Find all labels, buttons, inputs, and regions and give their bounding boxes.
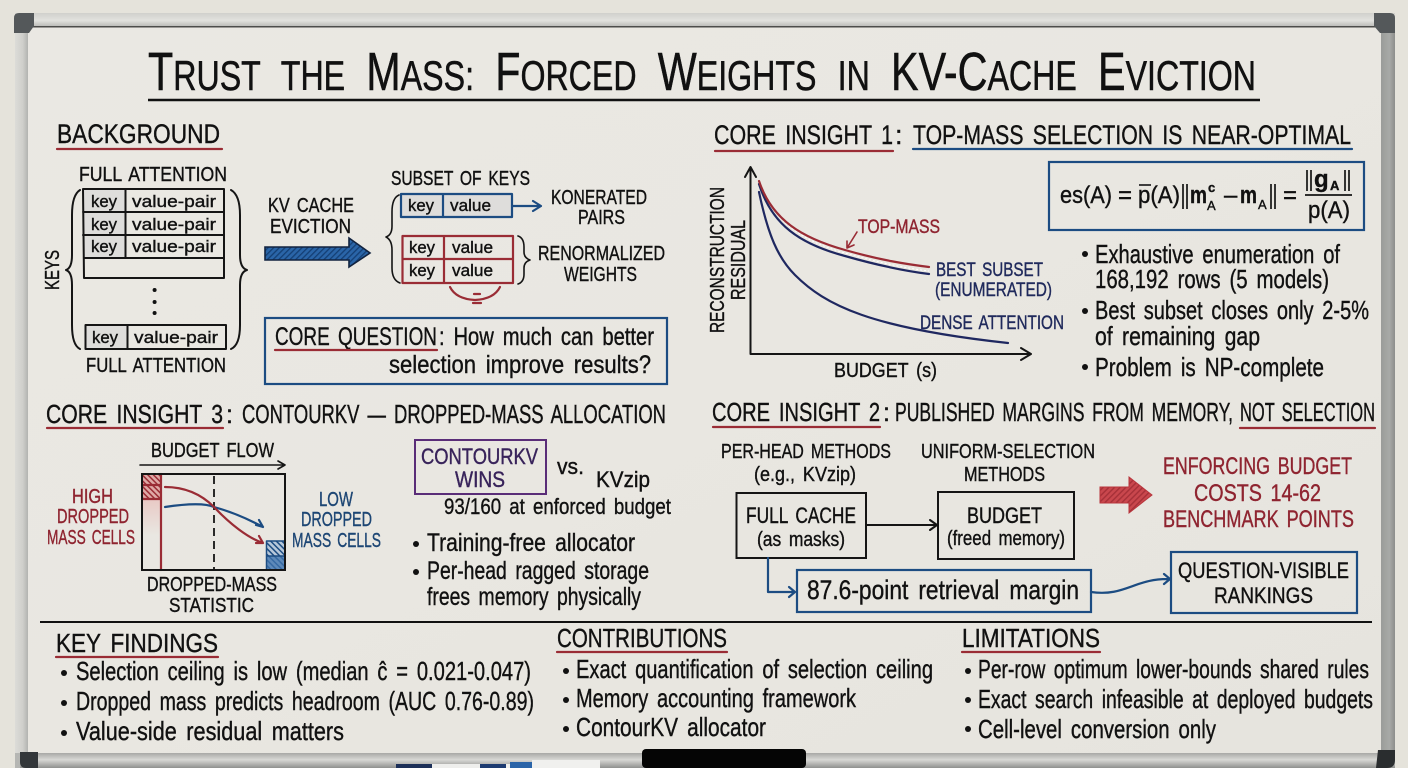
arrow: kv cache eviction — [265, 195, 370, 267]
arrow: kv cache eviction: KV CACHE — [268, 195, 354, 217]
subset of keys: SUBSET OF KEYS — [391, 168, 530, 190]
diagram: budget flow: DROPPED — [301, 509, 372, 531]
formula box: p(A) — [1138, 182, 1180, 209]
full attention table: key — [91, 237, 117, 256]
callout: core question: : How much can better — [439, 323, 654, 351]
flow diagram: memory margins: PER-HEAD METHODS — [721, 441, 891, 463]
bullet list: contributions — [563, 654, 933, 742]
formula box: g — [1314, 166, 1329, 193]
bullet list: insight 1: of remaining gap — [1095, 321, 1260, 351]
line chart: residual vs budget: TOP-MASS — [858, 217, 940, 238]
panel: core insight 2 — [712, 397, 1375, 613]
heading: key findings: KEY FINDINGS — [56, 628, 218, 658]
bullet list: insight 3 — [413, 529, 649, 611]
formula box: A — [1258, 197, 1267, 212]
formula box: A — [1330, 178, 1340, 193]
bullet list: insight 1: Problem is NP-complete — [1095, 352, 1324, 382]
panel: background — [42, 119, 667, 384]
subset of keys — [386, 168, 665, 303]
heading: core insight 3: : — [226, 401, 233, 429]
bullet list: insight 1: 168,192 rows (5 models) — [1095, 264, 1329, 294]
formula box: A — [1207, 198, 1216, 213]
callout: contourkv wins: KVzip — [596, 467, 650, 492]
heading: core insight 1: CORE INSIGHT 1 — [714, 120, 893, 150]
full attention table: KEYS — [42, 250, 64, 290]
eraser — [642, 749, 806, 768]
formula box: m — [1190, 182, 1207, 209]
full attention table: key — [91, 215, 117, 234]
heading: core insight 3: CONTOURKV — DROPPED-MASS ALLOCATION — [242, 399, 666, 429]
bullet list: insight 1: Exhaustive enumeration of — [1095, 239, 1341, 269]
line chart: residual vs budget: BUDGET (s) — [834, 360, 937, 382]
bullet list: contributions: Memory accounting framework — [576, 683, 857, 713]
flow diagram: memory margins: (freed memory) — [947, 528, 1065, 550]
formula box: c — [1208, 180, 1215, 195]
heading: limitations: LIMITATIONS — [962, 623, 1100, 653]
panel: key findings — [56, 628, 534, 746]
full attention table: key — [91, 192, 117, 211]
subset of keys: key — [409, 261, 435, 280]
diagram: budget flow — [47, 440, 381, 617]
formula box: es(A) — [1060, 182, 1112, 209]
heading: core insight 3: CORE INSIGHT 3 — [46, 399, 223, 429]
flow diagram: memory margins: (as masks) — [757, 529, 845, 551]
bullet list: key findings: Value-side residual matters — [76, 716, 344, 746]
formula box: m — [1240, 182, 1257, 209]
diagram: budget flow: DROPPED — [57, 506, 129, 528]
heading: background: BACKGROUND — [57, 119, 220, 149]
line chart: residual vs budget: (ENUMERATED) — [935, 280, 1052, 301]
full attention table: key — [92, 328, 118, 347]
flow diagram: memory margins: UNIFORM-SELECTION — [921, 441, 1095, 463]
subset of keys: PAIRS — [578, 207, 625, 229]
subset of keys: key — [409, 238, 435, 257]
full attention table: value-pair — [132, 192, 216, 211]
subset of keys: key — [408, 196, 434, 215]
heading: core insight 2 — [712, 397, 1375, 428]
heading: core insight 1: : — [895, 120, 903, 150]
callout: contourkv wins: vs. — [557, 454, 584, 479]
callout: contourkv wins: WINS — [455, 467, 505, 492]
bullet list: insight 3: Per-head ragged storage — [427, 557, 649, 585]
subset of keys: value — [452, 261, 493, 280]
full attention table — [42, 164, 247, 377]
full attention table: value-pair — [134, 328, 218, 347]
bullet list: contributions: ContourKV allocator — [576, 712, 766, 742]
bullet list: insight 3: frees memory physically — [427, 583, 641, 611]
diagram: budget flow: HIGH — [72, 486, 113, 508]
diagram: budget flow: MASS CELLS — [292, 530, 381, 552]
subset of keys: WEIGHTS — [564, 264, 637, 286]
heading: contributions: CONTRIBUTIONS — [557, 623, 727, 653]
bullet list: contributions: Exact quantification of selection ceiling — [576, 654, 933, 684]
bullet list: key findings: Dropped mass predicts headroom (AUC 0.76-0.89) — [76, 686, 534, 716]
full attention table: value-pair — [132, 215, 216, 234]
callout: core question: selection improve results? — [389, 351, 651, 379]
diagram: budget flow: DROPPED-MASS — [147, 574, 277, 596]
full attention table: value-pair — [132, 237, 216, 256]
callout: enforcing budget — [1163, 453, 1354, 533]
formula box: p(A) — [1308, 197, 1350, 224]
bullet list: key findings: Selection ceiling is low (median ĉ = 0.021-0.047) — [76, 656, 531, 686]
subset of keys: KONERATED — [551, 187, 647, 209]
panel: core insight 1 — [707, 120, 1369, 382]
bullet list: limitations — [965, 654, 1373, 744]
formula box: – — [1224, 182, 1238, 209]
flow diagram: memory margins: FULL CACHE — [746, 503, 856, 528]
diagram: budget flow: BUDGET FLOW — [151, 440, 274, 462]
heading: core insight 1 — [714, 120, 1352, 151]
title: TRUST THE MASS: FORCED WEIGHTS IN KV-CACHE EVICTION — [148, 42, 1256, 102]
bullet list: insight 3: Training-free allocator — [427, 529, 635, 557]
subset of keys: RENORMALIZED — [538, 243, 665, 265]
line chart: residual vs budget: DENSE ATTENTION — [920, 313, 1064, 334]
line chart: residual vs budget — [707, 167, 1064, 382]
line chart: residual vs budget: RESIDUAL — [728, 220, 750, 300]
full attention table: FULL ATTENTION — [86, 355, 226, 377]
arrow: red block — [1100, 477, 1152, 513]
formula box: = — [1283, 182, 1297, 209]
panel: limitations — [962, 623, 1373, 744]
callout: core question — [265, 318, 667, 384]
bullet list: limitations: Cell-level conversion only — [978, 714, 1216, 744]
marker on tray — [396, 760, 600, 768]
heading: core insight 2: PUBLISHED MARGINS FROM MEMORY, — [895, 397, 1233, 427]
arrow: kv cache eviction: EVICTION — [270, 216, 351, 238]
formula box — [1049, 162, 1364, 230]
line chart: residual vs budget: RECONSTRUCTION — [707, 187, 729, 333]
callout: contourkv wins: 93/160 at enforced budget — [444, 494, 671, 519]
bullet list: key findings — [61, 656, 534, 746]
panel: core insight 3 — [46, 399, 671, 617]
bullet list: insight 1 — [1082, 239, 1369, 382]
callout: core question: CORE QUESTION — [275, 323, 437, 351]
full attention table: FULL ATTENTION — [79, 164, 227, 186]
panel: contributions — [557, 623, 933, 742]
formula box: = — [1118, 182, 1132, 209]
callout: contourkv wins: CONTOURKV — [421, 444, 538, 469]
flow diagram: memory margins: QUESTION-VISIBLE — [1178, 558, 1349, 583]
flow diagram: memory margins — [721, 441, 1357, 613]
heading: core insight 2: CORE INSIGHT 2 — [712, 397, 880, 427]
flow diagram: memory margins: BUDGET — [967, 503, 1042, 528]
flow diagram: memory margins: RANKINGS — [1214, 583, 1313, 608]
callout: contourkv wins — [415, 440, 671, 519]
flow diagram: memory margins: (e.g., KVzip) — [754, 464, 856, 486]
diagram: budget flow: LOW — [319, 489, 353, 511]
diagram: budget flow: MASS CELLS — [47, 527, 135, 549]
callout: enforcing budget: COSTS 14-62 — [1194, 480, 1321, 507]
line chart: residual vs budget: BEST SUBSET — [936, 260, 1043, 281]
subset of keys: value — [452, 238, 493, 257]
heading: core insight 3 — [46, 399, 666, 429]
heading: core insight 2: : — [883, 399, 890, 427]
flow diagram: memory margins: 87.6-point retrieval margin — [807, 575, 1079, 605]
diagram: budget flow: STATISTIC — [169, 595, 254, 617]
flow diagram: memory margins: METHODS — [964, 464, 1045, 486]
subset of keys: value — [450, 196, 491, 215]
